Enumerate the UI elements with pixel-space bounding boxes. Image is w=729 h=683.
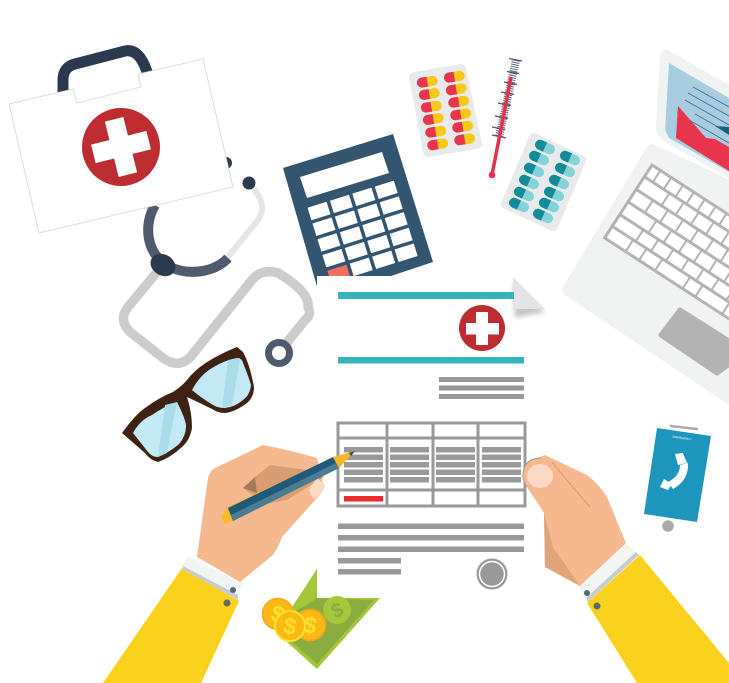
icon: teal pill blister <box>506 138 582 226</box>
icon: gold coins: $ <box>301 611 319 639</box>
icon: first aid case <box>9 51 233 233</box>
laptop screen lid <box>656 50 729 178</box>
icon: pencil <box>221 451 355 524</box>
icon: stethoscope <box>123 157 309 364</box>
icon: red cross badge <box>459 305 505 351</box>
icon: smartphone <box>644 426 711 522</box>
laptop keyboard <box>605 165 729 331</box>
icon: laptop <box>568 50 729 398</box>
icon: gold coins <box>262 598 326 641</box>
icon: gold coins: $ <box>269 600 287 628</box>
left cuff <box>182 556 243 600</box>
footer text lines <box>338 524 524 574</box>
left hand <box>197 445 323 582</box>
icon: banknote: $ <box>328 599 347 623</box>
icon: red and yellow pill blister <box>414 69 477 152</box>
icon: phone handset <box>660 453 688 490</box>
paper fold corner <box>513 277 545 318</box>
laptop base <box>568 150 729 398</box>
address lines <box>439 377 524 399</box>
icon: gold coins: $ <box>281 612 299 640</box>
header rule top <box>338 292 514 299</box>
icon: thermometer <box>489 58 522 178</box>
header rule bottom <box>338 357 524 364</box>
left sleeve <box>103 568 239 683</box>
invoice table <box>338 423 525 506</box>
icon: banknote <box>287 569 380 669</box>
phone home button <box>662 520 674 532</box>
right cuff <box>578 543 639 602</box>
laptop trackpad <box>661 310 729 373</box>
right arm and hand <box>523 455 729 683</box>
paper bill <box>317 276 545 597</box>
right sleeve <box>587 555 729 683</box>
stamp <box>478 560 506 588</box>
icon: smartphone: EMERGENCY <box>672 435 692 441</box>
icon: calculator <box>283 134 433 290</box>
icon: glasses <box>122 347 254 462</box>
left arm and hand <box>103 445 325 683</box>
right hand <box>523 455 626 586</box>
